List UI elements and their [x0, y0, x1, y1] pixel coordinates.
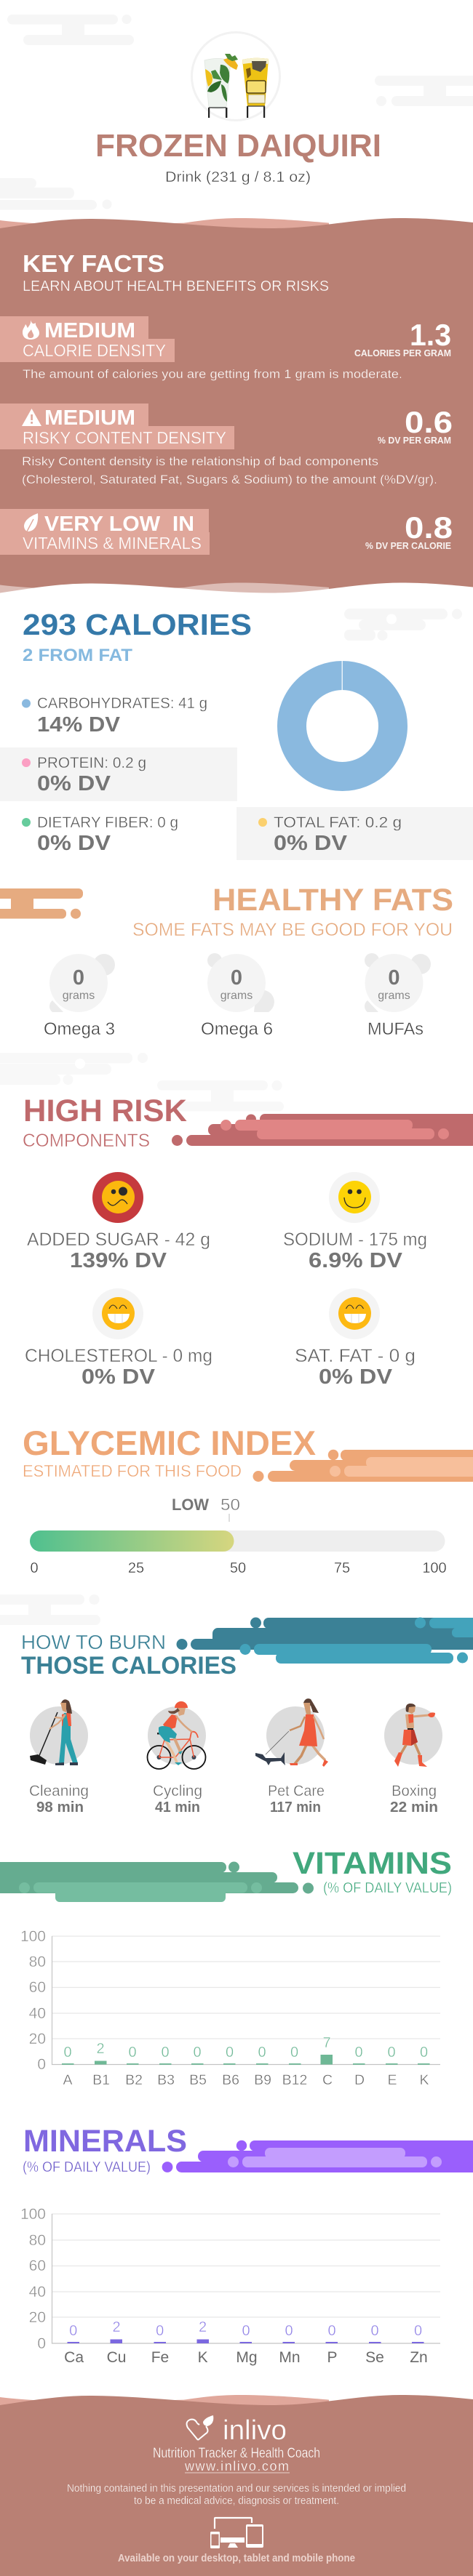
icon: leaf [24, 513, 38, 531]
serving size: Drink (231 g / 8.1 oz) [165, 169, 311, 185]
decorative clouds in header [0, 15, 473, 209]
bar chart: minerals: 0 [37, 2335, 46, 2352]
glycemic meter [30, 1496, 447, 1576]
activity: pet care [255, 1698, 328, 1815]
icon: dog walker [255, 1698, 328, 1767]
subheading: components: COMPONENTS [23, 1131, 150, 1151]
heading: high risk: HIGH RISK [23, 1094, 187, 1128]
heading: vitamins [293, 1846, 452, 1896]
bars: vitamins [0, 1861, 314, 1902]
risk: cholesterol [25, 1288, 212, 1389]
glycemic meter: 50 [220, 1496, 240, 1514]
donut chart [292, 661, 393, 777]
bar chart: vitamins: E [387, 2072, 397, 2088]
bar chart: minerals: Zn [410, 2349, 428, 2366]
bar chart: vitamins: 0 [63, 2045, 72, 2061]
fat: omega 3: 0 [73, 966, 84, 990]
icon: devices [210, 2518, 263, 2548]
macro: total fat [236, 807, 473, 860]
bar chart: vitamins: B1 [92, 2072, 110, 2088]
bar chart: minerals: 0 [285, 2323, 293, 2339]
bar chart: vitamins: 0 [128, 2045, 137, 2061]
fat: mufas: MUFAs [367, 1019, 424, 1039]
activity: cycling [147, 1701, 206, 1815]
bar chart: minerals: Se [365, 2349, 384, 2366]
bars: high risk [172, 1114, 473, 1146]
footer wave [0, 2395, 473, 2576]
stat: 0.8: 0.8 [405, 510, 453, 545]
fat: omega 6 [201, 953, 274, 1039]
decorative cloud [0, 1594, 100, 1625]
bar chart: minerals: 0 [242, 2323, 250, 2339]
fat: mufas: 0 [388, 966, 400, 990]
decorative cloud [344, 609, 462, 641]
macro: dietary fiber: DIETARY FIBER: 0 g [37, 814, 178, 831]
bar chart: minerals: 100 [20, 2206, 46, 2223]
bar chart: minerals: Mg [236, 2349, 258, 2366]
stat: 0.8: % DV PER CALORIE [365, 540, 451, 551]
bar chart: vitamins: 0 [387, 2045, 396, 2061]
bar chart: minerals: 0 [414, 2323, 422, 2339]
decorative clouds [0, 1053, 284, 1111]
macro: total fat: 0% DV [274, 832, 348, 855]
bar chart: minerals: Fe [151, 2349, 169, 2366]
heading: minerals: (% OF DAILY VALUE) [23, 2159, 151, 2175]
bar chart: vitamins [20, 1928, 440, 2088]
risk: saturated fat [295, 1288, 416, 1389]
bar chart: vitamins: 0 [354, 2045, 363, 2061]
bar chart: minerals: 2 [112, 2319, 121, 2335]
activity: pet care: Pet Care [268, 1783, 325, 1799]
website link: www.inlivo.com [184, 2459, 289, 2473]
activity: cleaning: 98 min [36, 1799, 84, 1815]
wave top [0, 218, 473, 603]
bar chart: vitamins: B9 [254, 2072, 271, 2088]
panel: footer [0, 2395, 473, 2576]
glycemic meter: 100 [422, 1560, 447, 1576]
bar chart: vitamins: 0 [161, 2045, 170, 2061]
bar chart: minerals: 40 [29, 2284, 46, 2300]
bars: minerals [162, 2140, 473, 2172]
activity: cycling: 41 min [155, 1799, 200, 1815]
icon: orange bars [0, 888, 83, 919]
heading: key facts: KEY FACTS [23, 250, 164, 277]
panel: key facts [0, 218, 473, 607]
activity: boxing [384, 1704, 442, 1815]
activity: cycling: Cycling [153, 1783, 202, 1799]
vitamins badge: VITAMINS & MINERALS [23, 534, 202, 553]
bar chart: vitamins: B3 [157, 2072, 175, 2088]
bar chart: vitamins: 0 [420, 2045, 428, 2061]
bar chart: minerals: 0 [327, 2323, 336, 2339]
risky content description: Risky Content density is the relationship of bad components [22, 454, 378, 468]
risk: saturated fat: 0% DV [319, 1365, 393, 1389]
activity: pet care: 117 min [270, 1799, 321, 1815]
wave bottom [0, 583, 473, 607]
glycemic meter: 50 [230, 1560, 246, 1576]
heading: glycemic index: GLYCEMIC INDEX [23, 1424, 316, 1462]
icon: grin [329, 1288, 380, 1339]
heading: healthy fats: HEALTHY FATS [212, 883, 453, 918]
logo [187, 2415, 287, 2446]
glycemic meter: 25 [128, 1560, 144, 1576]
risk: sodium [283, 1172, 427, 1272]
bar chart: minerals: 60 [29, 2258, 46, 2274]
fat: omega 6: 0 [231, 966, 242, 990]
bar chart: vitamins: B12 [282, 2072, 307, 2088]
tagline: Nutrition Tracker & Health Coach [153, 2446, 320, 2461]
glycemic meter: LOW [172, 1496, 209, 1514]
bar chart: vitamins: 0 [258, 2045, 266, 2061]
bar chart: vitamins: 80 [29, 1954, 46, 1970]
stat: 1.3 calories per gram: CALORIES PER GRAM [354, 348, 451, 358]
bar chart: vitamins: 60 [29, 1979, 46, 1996]
icon: flame [23, 320, 39, 340]
risky content badge [0, 404, 234, 449]
risk: sodium: SODIUM - 175 mg [283, 1229, 427, 1250]
icon: warning [22, 409, 41, 426]
icon: grin [92, 1288, 143, 1339]
bars: glycemic [253, 1450, 473, 1482]
fat: mufas: grams [378, 990, 410, 1002]
bar chart: vitamins: 0 [290, 2045, 298, 2061]
stat: 0.6: % DV PER GRAM [378, 435, 451, 446]
calorie density badge [0, 316, 175, 362]
macro: protein [0, 747, 237, 801]
heading: minerals: MINERALS [23, 2124, 187, 2159]
calorie density description: The amount of calories you are getting from 1 gram is moderate. [23, 367, 402, 381]
bar chart: vitamins: 40 [29, 2005, 46, 2022]
bar chart: minerals: 0 [69, 2323, 77, 2339]
bar chart: vitamins: B2 [125, 2072, 143, 2088]
icon: smile [329, 1172, 380, 1223]
calorie density badge: MEDIUM [44, 319, 135, 342]
stat: 1.3 calories per gram: 1.3 [410, 318, 451, 352]
activity: boxing: Boxing [391, 1783, 437, 1799]
macro: protein: PROTEIN: 0.2 g [37, 755, 146, 771]
bar chart: vitamins: B6 [222, 2072, 239, 2088]
bar chart: minerals: 2 [199, 2319, 207, 2335]
risk: added sugar: ADDED SUGAR - 42 g [27, 1229, 210, 1250]
food image [192, 32, 279, 121]
subheading: LEARN ABOUT HEALTH BENEFITS OR RISKS [23, 278, 329, 294]
macro: carbohydrates: 14% DV [37, 713, 121, 737]
subheading: ESTIMATED FOR THIS FOOD [23, 1461, 242, 1480]
calorie density badge: CALORIE DENSITY [23, 341, 166, 360]
bar chart: minerals: K [198, 2349, 208, 2366]
macro: protein: 0% DV [37, 772, 111, 795]
disclaimer: to be a medical advice, diagnosis or treatment. [134, 2495, 339, 2507]
macro: carbohydrates [22, 695, 207, 737]
icon: sad face [92, 1172, 143, 1223]
bar chart: vitamins: K [419, 2072, 429, 2088]
bar chart: vitamins: A [63, 2072, 73, 2088]
icon: cyclist [147, 1701, 205, 1769]
bar chart: minerals: 0 [156, 2323, 164, 2339]
glycemic meter: 0 [30, 1560, 39, 1576]
risky content badge: RISKY CONTENT DENSITY [23, 428, 226, 447]
bar chart: minerals: 0 [370, 2323, 379, 2339]
fat: omega 3: grams [63, 990, 95, 1002]
bar chart: vitamins: C [322, 2072, 333, 2088]
disclaimer [67, 2482, 406, 2507]
macro: total fat: TOTAL FAT: 0.2 g [274, 814, 402, 831]
availability note: Available on your desktop, tablet and mobile phone [118, 2553, 355, 2564]
bar chart: vitamins: 0 [193, 2045, 202, 2061]
bar chart: vitamins: 0 [226, 2045, 234, 2061]
bar chart: vitamins: 20 [29, 2031, 46, 2047]
heading: how to burn [21, 1631, 236, 1680]
risk: saturated fat: SAT. FAT - 0 g [295, 1346, 416, 1366]
title: FROZEN DAIQUIRI [95, 128, 381, 164]
bar chart: vitamins: 7 [322, 2035, 331, 2051]
risky content description [22, 454, 437, 486]
icon: boxer [394, 1704, 435, 1767]
glycemic meter: 75 [334, 1560, 350, 1576]
risk: cholesterol: 0% DV [82, 1365, 156, 1389]
icon: sweeping figure [30, 1699, 78, 1765]
heading: how to burn: THOSE CALORIES [21, 1652, 236, 1680]
stat: 0.8 [365, 510, 453, 551]
bar chart: vitamins: 0 [37, 2056, 46, 2073]
risk: cholesterol: CHOLESTEROL - 0 mg [25, 1346, 212, 1366]
fat: omega 3: Omega 3 [44, 1019, 115, 1039]
vitamins badge [0, 509, 210, 555]
subheading: SOME FATS MAY BE GOOD FOR YOU [132, 920, 453, 940]
fat: omega 6: Omega 6 [201, 1019, 273, 1039]
heading: vitamins: (% OF DAILY VALUE) [323, 1879, 452, 1896]
activity: cleaning [29, 1699, 89, 1815]
heading: minerals [23, 2124, 187, 2175]
heading: vitamins: VITAMINS [293, 1846, 452, 1881]
bar chart: minerals: P [327, 2349, 338, 2366]
risk: added sugar: 139% DV [70, 1249, 167, 1272]
stat: 0.6 [378, 405, 453, 446]
fat: omega 6: grams [220, 990, 253, 1002]
bar chart: vitamins: 100 [20, 1928, 46, 1945]
bar chart: minerals: 20 [29, 2309, 46, 2326]
bar chart: minerals [20, 2206, 440, 2366]
macro: carbohydrates: CARBOHYDRATES: 41 g [37, 695, 207, 712]
logo: inlivo [223, 2415, 287, 2446]
bar chart: vitamins: B5 [189, 2072, 207, 2088]
subheading: from fat: 2 FROM FAT [23, 646, 132, 665]
icon: left glass [204, 54, 238, 118]
heading: how to burn: HOW TO BURN [21, 1631, 166, 1653]
disclaimer: Nothing contained in this presentation and our services is intended or implied [67, 2482, 406, 2495]
risk: added sugar [27, 1172, 210, 1272]
macro: dietary fiber [22, 814, 178, 855]
bar chart: vitamins: 2 [96, 2041, 105, 2057]
bars: burn [176, 1617, 473, 1664]
stat: 0.6: 0.6 [405, 405, 453, 439]
bar chart: vitamins: D [354, 2072, 365, 2088]
bar chart: minerals: Mn [279, 2349, 301, 2366]
activity: boxing: 22 min [390, 1799, 438, 1815]
bar chart: minerals: Cu [107, 2349, 126, 2366]
macro: dietary fiber: 0% DV [37, 832, 111, 855]
risky content description: (Cholesterol, Saturated Fat, Sugars & Sodium) to the amount (%DV/gr). [22, 473, 437, 486]
bar chart: minerals: 80 [29, 2232, 46, 2249]
heading: calories: 293 CALORIES [23, 608, 252, 641]
risky content badge: MEDIUM [44, 406, 135, 430]
vitamins badge: VERY LOW IN [44, 513, 194, 536]
fat: omega 3 [44, 954, 115, 1039]
activity: cleaning: Cleaning [29, 1783, 89, 1799]
bar chart: minerals: Ca [64, 2349, 84, 2366]
fat: mufas [365, 953, 431, 1039]
risk: sodium: 6.9% DV [309, 1249, 403, 1272]
icon: right glass [242, 58, 269, 118]
stat: 1.3 calories per gram [354, 318, 451, 358]
